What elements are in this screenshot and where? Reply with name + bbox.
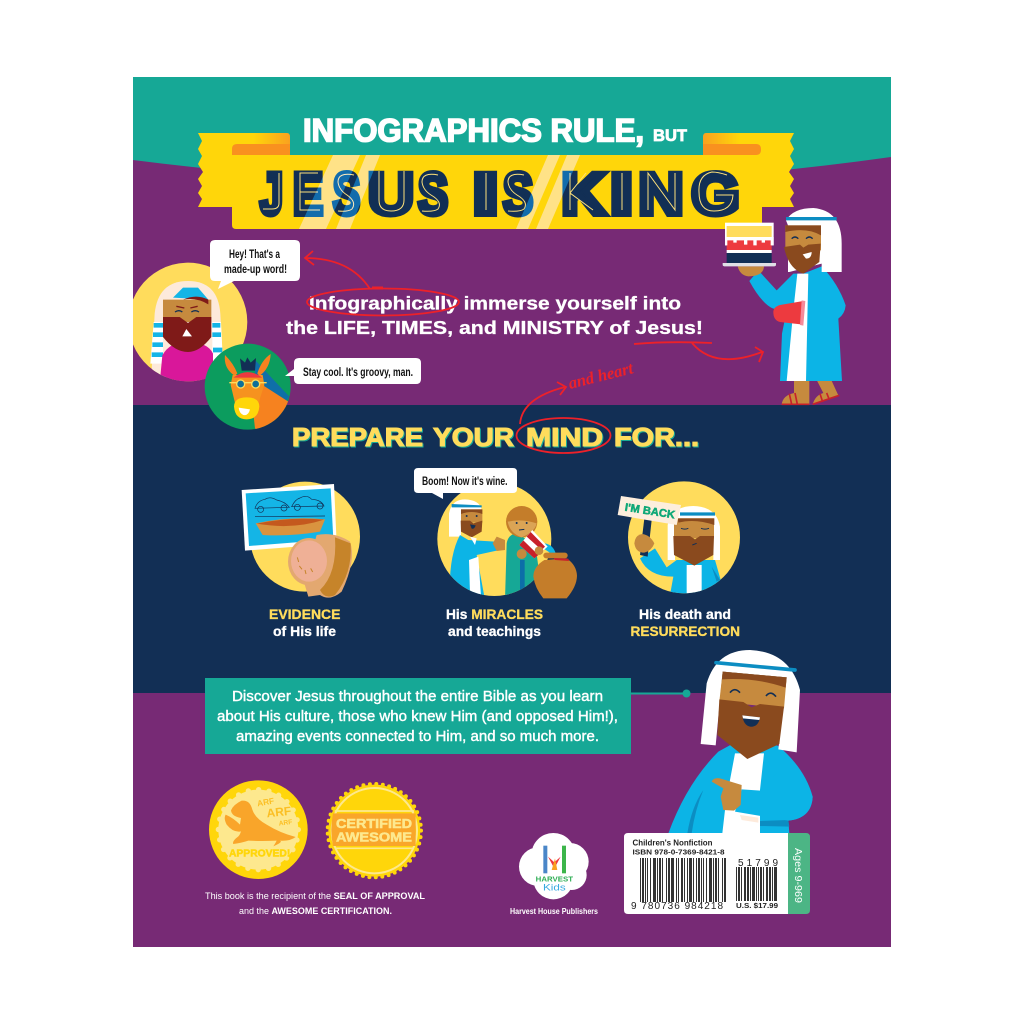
robe	[668, 743, 813, 833]
caption: resurrection	[630, 607, 740, 639]
character: groovy donkey	[205, 344, 291, 440]
callout: discover Jesus: about His culture, those who knew Him (and opposed Him!),	[217, 709, 618, 725]
robe centre	[787, 274, 808, 381]
publisher logo	[519, 833, 589, 899]
H mark	[543, 846, 566, 873]
title: Jesus is King: E	[293, 162, 323, 227]
approved label: APPROVED!	[229, 849, 290, 860]
hand	[712, 778, 742, 811]
barcode panel: U.S. $17.99	[736, 901, 778, 910]
badge caption: and the AWESOME CERTIFICATION.	[239, 906, 392, 916]
icon: water into wine miracle	[437, 482, 577, 600]
robe centre	[722, 753, 764, 833]
arf labels: ARF	[256, 795, 275, 808]
Jesus figure	[449, 499, 482, 537]
title line: Infographics rule, but: BUT	[653, 126, 688, 145]
red annotation: circled word with arrow	[305, 251, 459, 316]
main bars	[640, 858, 727, 902]
caption: miracles	[446, 607, 543, 639]
age tab: Ages 9-969	[792, 848, 803, 903]
heading: Prepare your mind for: FOR...	[614, 424, 699, 452]
title line: Infographics rule, but: INFOGRAPHICS RULE,	[303, 112, 644, 148]
title: Jesus is King: I	[472, 162, 498, 227]
callout: discover Jesus	[205, 678, 631, 754]
hand	[738, 266, 764, 276]
barcode digits: 9 780736 984218	[631, 901, 723, 912]
book cover	[133, 77, 891, 947]
title: Jesus is King	[260, 162, 740, 227]
ring band	[303, 534, 352, 598]
yellow circle	[628, 481, 740, 593]
eyes	[730, 690, 776, 697]
background panels	[133, 77, 891, 947]
coin	[288, 538, 330, 585]
title: Jesus is King: G	[692, 162, 740, 227]
cuff	[543, 543, 556, 553]
wine jar	[533, 553, 577, 598]
guest figure	[505, 533, 538, 600]
seal	[225, 801, 296, 846]
speech bubble: groovy	[285, 358, 421, 384]
heading: Prepare your mind for: YOUR	[433, 424, 514, 452]
publisher name: Harvest House Publishers	[510, 907, 599, 916]
clasped hands	[493, 537, 505, 551]
arf labels: ARF	[266, 804, 292, 820]
caption: evidence: of His life	[273, 624, 337, 639]
green circle	[205, 344, 291, 430]
barcode panel	[624, 833, 810, 914]
callout: discover Jesus: Discover Jesus throughout the entire Bible as you learn	[232, 689, 603, 705]
red annotation: circled mind with and heart: and heart	[566, 358, 636, 393]
badge: certified awesome: AWESOME	[336, 831, 412, 845]
publisher logo: Kids	[543, 883, 566, 893]
title: Jesus is King: S	[418, 162, 448, 227]
face	[719, 672, 787, 708]
yellow circle	[250, 482, 360, 592]
character: large Jesus pointing	[668, 650, 813, 833]
headdress	[786, 208, 842, 272]
badge caption: This book is the recipient of the SEAL OF APPROVAL	[205, 891, 426, 901]
title: Jesus is King: I	[610, 162, 633, 227]
title: Jesus is King: S	[333, 162, 360, 227]
speech bubble: made-up word	[210, 240, 300, 289]
striped cloth	[517, 530, 548, 559]
speech bubble: made-up word: made-up word!	[224, 264, 287, 276]
badge: certified awesome	[328, 784, 421, 877]
speech bubble: groovy: Stay cool. It's groovy, man.	[303, 365, 413, 379]
legs and sandals	[782, 379, 839, 405]
caption: miracles: His MIRACLES	[446, 607, 543, 622]
cloud	[519, 833, 589, 899]
title: Jesus is King: U	[368, 162, 414, 227]
badge: certified awesome: CERTIFIED	[336, 817, 412, 831]
sign: I'M BACK	[624, 502, 676, 522]
intro text	[286, 292, 703, 338]
intro text: Infographically immerse yourself into	[309, 292, 681, 314]
caption: resurrection: His death and	[639, 607, 731, 622]
character: listener with speech	[133, 263, 247, 384]
yellow circle	[437, 482, 551, 596]
beard	[717, 699, 784, 759]
red annotation: underline with arrow	[634, 342, 763, 362]
title: Jesus is King: J	[260, 162, 283, 227]
speech bubble: made-up word: Hey! That's a	[229, 249, 280, 261]
sleeve	[735, 773, 813, 821]
icon: evidence artifacts	[242, 482, 360, 598]
smile	[742, 715, 760, 727]
character: Jesus with cake	[723, 208, 846, 405]
heading: Prepare your mind for: PREPARE	[292, 424, 423, 452]
cake	[723, 223, 776, 266]
callout: discover Jesus: amazing events connected to Him, and so much more.	[236, 729, 599, 745]
icon: resurrected Jesus with sign	[618, 481, 740, 595]
category and ISBN: Children's Nonfiction	[632, 838, 713, 848]
caption: miracles: and teachings	[448, 624, 541, 639]
headdress	[701, 650, 800, 752]
arf labels: ARF	[278, 819, 293, 828]
title: Jesus is King: N	[638, 162, 684, 227]
badge caption	[205, 891, 426, 916]
oven mitt	[773, 300, 805, 326]
caption: evidence	[269, 607, 340, 639]
speech bubble: now it's wine	[414, 468, 517, 499]
robe	[749, 266, 846, 381]
banner ribbon	[198, 133, 794, 229]
badge: seal of approval	[209, 780, 308, 879]
figure	[150, 281, 224, 384]
red annotation: circled mind with and heart	[516, 358, 636, 453]
add-on bars	[736, 867, 778, 901]
title: Jesus is King: S	[503, 162, 533, 227]
title: Jesus is King: K	[562, 162, 606, 227]
yellow circle	[133, 263, 247, 381]
intro text: the LIFE, TIMES, and MINISTRY of Jesus!	[286, 317, 703, 338]
headband	[716, 663, 795, 670]
arf labels	[256, 795, 293, 828]
speech bubble: now it's wine: Boom! Now it's wine.	[422, 474, 508, 488]
barcode panel: ISBN 978-0-7369-8421-8	[632, 848, 724, 856]
photo	[242, 484, 337, 551]
barcode panel: 51799	[738, 858, 778, 869]
caption: resurrection: RESURRECTION	[630, 624, 740, 639]
wordmark: HARVEST	[536, 875, 574, 884]
ribbon highlight stripes	[299, 155, 580, 229]
heading: Prepare your mind for: MIND	[526, 424, 603, 452]
caption: evidence: EVIDENCE	[269, 607, 340, 622]
face	[785, 225, 821, 250]
pole and hand	[634, 518, 654, 557]
connector line with dot	[631, 690, 690, 698]
hair	[722, 672, 787, 688]
band	[335, 811, 414, 848]
